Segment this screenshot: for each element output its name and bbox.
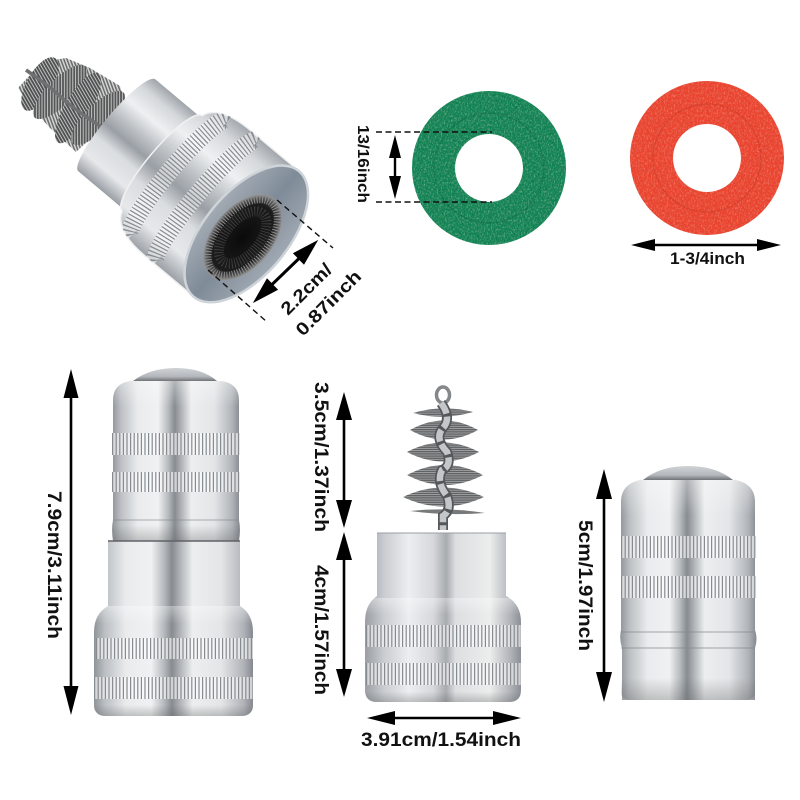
wide collar: [99, 91, 331, 324]
dashed guides: [376, 132, 492, 202]
cap body: [620, 480, 756, 700]
dimension: socket height: [310, 532, 352, 697]
icon: red washer: [630, 81, 784, 235]
label: 7.9cm/3.11inch: 7.9cm/3.11inch: [43, 491, 64, 639]
socket body rotated along axis: [77, 78, 310, 304]
panel: green felt washer: [354, 91, 566, 245]
arrow: hole diameter: [389, 135, 401, 199]
product: cap: [620, 466, 756, 700]
product: assembled tool front view: [94, 368, 253, 716]
knurled bands lower: [94, 638, 253, 699]
label: 1-3/4inch: 1-3/4inch: [670, 250, 745, 268]
label: 2.2cm/: 2.2cm/: [277, 259, 336, 319]
hole with inner bristles: [188, 180, 298, 295]
upper cap body: [112, 381, 240, 541]
icon: green washer: [412, 91, 566, 245]
wire brush: [403, 387, 485, 530]
lower socket body: [94, 541, 253, 716]
neck: [69, 72, 206, 214]
arrow: diameter: [247, 234, 324, 309]
arrow: socket width: [367, 711, 521, 725]
knurled bands: [119, 109, 259, 262]
label: 4cm/1.57inch: 4cm/1.57inch: [310, 565, 331, 695]
dome cap: [643, 466, 733, 480]
dimension: inner diameter 2.2cm: [208, 200, 365, 340]
product: angled brush cleaner tool: [18, 57, 310, 304]
knurled bands: [366, 625, 521, 685]
dome cap: [133, 368, 217, 381]
arrow: brush height: [336, 392, 352, 528]
neck: [365, 533, 521, 702]
knurled bands: [621, 536, 756, 598]
label: 3.5cm/1.37inch: 3.5cm/1.37inch: [310, 382, 331, 532]
end face: [161, 144, 331, 324]
dimension: brush height: [310, 382, 352, 532]
knurled bands upper: [112, 433, 240, 492]
dimension: cap height: [574, 469, 612, 702]
arrow: socket height: [336, 532, 352, 697]
dimension: socket width: [361, 711, 521, 751]
arrow: cap height: [596, 469, 612, 702]
arrow: height: [64, 369, 78, 715]
dimension: overall height: [43, 369, 78, 715]
icon: wire brush tip: [14, 52, 133, 153]
label: 13/16inch: 13/16inch: [354, 125, 371, 203]
label: 0.87inch: 0.87inch: [292, 266, 365, 340]
label: 3.91cm/1.54inch: 3.91cm/1.54inch: [361, 730, 521, 751]
product: brush and socket: [365, 387, 521, 702]
arrow: outer diameter: [631, 239, 781, 251]
label: 5cm/1.97inch: 5cm/1.97inch: [574, 520, 595, 651]
panel: red felt washer: [630, 81, 784, 268]
